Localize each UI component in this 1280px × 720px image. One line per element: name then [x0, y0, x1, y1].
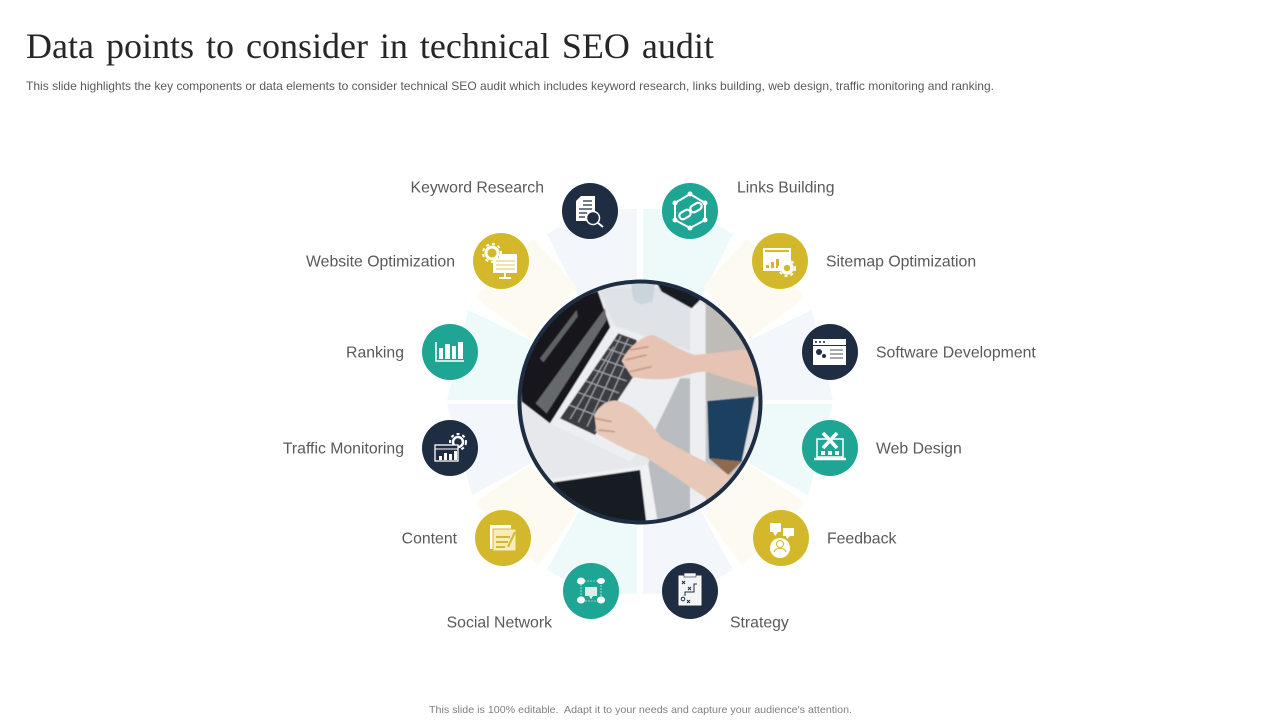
icon: social network	[563, 563, 619, 619]
icon: software development	[802, 324, 858, 380]
label: Content: Content	[402, 530, 458, 548]
label: Website Optimization: Website Optimization	[306, 254, 455, 270]
icon: traffic monitoring	[422, 420, 478, 476]
icon: feedback	[753, 510, 809, 566]
subtitle: This slide highlights the key components or data elements to consider technical SEO audit which includes keyword research, links building, web design, traffic monitoring and ranking.	[26, 79, 994, 93]
icon: strategy	[662, 563, 718, 619]
footer note: This slide is 100% editable. Adapt it to your needs and capture your audience's attention.	[429, 704, 852, 716]
label: Strategy: Strategy	[730, 614, 789, 632]
label: Sitemap Optimization: Sitemap Optimization	[826, 254, 976, 270]
label: Feedback: Feedback	[827, 530, 896, 548]
label: Keyword Research: Keyword Research	[411, 180, 544, 196]
title: Data points to consider in technical SEO audit	[26, 26, 714, 66]
label: Web Design: Web Design	[876, 440, 962, 458]
icon: sitemap optimization	[752, 233, 808, 289]
radial segments	[447, 209, 833, 594]
icon: links building	[662, 183, 718, 239]
icon: website optimization	[473, 233, 529, 289]
label: Traffic Monitoring: Traffic Monitoring	[283, 440, 404, 458]
icon: ranking	[422, 324, 478, 380]
label: Social Network: Social Network	[447, 614, 552, 632]
center photo: hands typing on laptop	[515, 275, 765, 528]
icon: web design	[802, 420, 858, 476]
label: Software Development: Software Development	[876, 344, 1036, 362]
label: Ranking: Ranking	[346, 344, 404, 362]
label: Links Building: Links Building	[737, 180, 834, 196]
icon: keyword research	[562, 183, 618, 239]
icon: content	[475, 510, 531, 566]
